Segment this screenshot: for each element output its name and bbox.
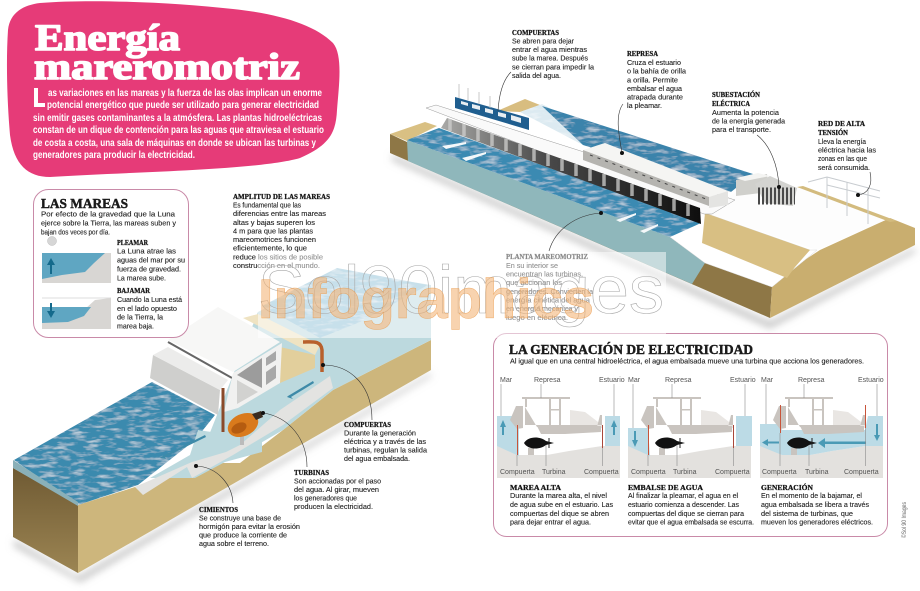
text: subestación eléctrica xyxy=(712,89,786,134)
block: sand pit xyxy=(702,213,810,278)
text: subestación eléctrica: para el transporte. xyxy=(712,125,771,134)
watermark: Infographics: Infographics xyxy=(258,267,594,330)
text: compuertas right: sube la marea. Después xyxy=(512,54,588,62)
text: compuertas left: COMPUERTAS xyxy=(344,420,391,429)
text: represa: o la bahía de orilla xyxy=(627,66,687,76)
diagram: embalse de agua: Compuerta xyxy=(715,469,750,476)
diagram: generación: Represa xyxy=(798,377,825,384)
text: embalse de agua: estuario comienza a descender. Las xyxy=(628,500,739,509)
text: planta mareomotriz: PLANTA MAREOMOTRIZ xyxy=(506,252,588,261)
text: marea alta: para dejar entrar el agua. xyxy=(510,518,591,526)
diagram: marea alta: Compuerta xyxy=(584,469,619,476)
intro: Por efecto de la gravedad que la Luna xyxy=(41,210,176,218)
subtitle: Al igual que en una central hidroeléctrica, el agua embalsada mueve una turbina que acciona los generadores. xyxy=(510,356,864,366)
text: red de alta tensión: TENSIÓN xyxy=(818,127,849,137)
dam: interior lower chamber xyxy=(237,380,258,404)
text: compuertas right: Se abren para dejar xyxy=(512,36,574,46)
diagram: marea alta: Turbina xyxy=(542,469,566,476)
panel frame xyxy=(494,334,888,536)
text: embalse de agua: compuertas del dique se cierran para xyxy=(628,509,745,518)
diagram: marea alta: Compuerta xyxy=(500,469,535,476)
dam: turbine hall strip xyxy=(441,118,701,224)
heading: LA GENERACIÓN DE ELECTRICIDAD xyxy=(509,342,753,357)
diagram: embalse de agua: Turbina xyxy=(673,469,697,476)
plant building: end wall xyxy=(709,191,728,208)
text: turbinas xyxy=(294,468,381,511)
text: planta mareomotriz xyxy=(506,252,594,322)
text: bajamar: en el lado opuesto xyxy=(117,304,177,313)
text: compuertas left: del agua embalsada. xyxy=(344,454,410,463)
intro text: as variaciones en las mareas y la fuerza de las olas implican un enorme xyxy=(48,88,322,99)
text: amplitud de las mareas: mareomotrices funcionen xyxy=(233,235,316,244)
text: turbinas: los generadores que xyxy=(294,494,357,502)
text: cimientos xyxy=(199,505,300,548)
illustration: right isometric view of tidal plant xyxy=(390,84,915,318)
text: cimientos: hormigón para evitar la erosión xyxy=(199,522,300,531)
diagram: embalse de agua xyxy=(628,377,756,478)
diagram: embalse de agua: Estuario xyxy=(730,377,756,384)
text: planta mareomotriz: generadores. Convierten la xyxy=(506,287,594,296)
watermark: Sol90images outline: Sol90images xyxy=(258,252,664,328)
estuary shallow water xyxy=(205,270,431,455)
intro text: potencial energético que puede ser utilizado para generar electricidad xyxy=(47,100,319,111)
blue gate frame xyxy=(455,84,529,130)
dam: column windows xyxy=(266,351,276,385)
text: compuertas right: se cierran para impedir la xyxy=(512,62,595,72)
text: amplitud de las mareas: altas y bajas superen los xyxy=(233,218,315,227)
intro text xyxy=(33,88,324,161)
shadow: right block xyxy=(392,155,915,328)
gate: rear xyxy=(303,342,322,372)
text: planta mareomotriz: luego en eléctrica. xyxy=(506,313,568,322)
text: compuertas right: salida del agua. xyxy=(512,71,561,80)
flow arrow: sea xyxy=(160,435,206,459)
dam: lower slab xyxy=(153,347,228,390)
high-voltage line: sand strip and pylons xyxy=(797,177,897,224)
text: represa: a orilla. Permite xyxy=(627,76,678,84)
text: generación: agua embalsada se libera a través xyxy=(761,500,869,509)
flow arrow: estuary xyxy=(287,381,314,399)
diagram: generación: Estuario xyxy=(858,377,884,384)
text: represa: Cruza el estuario xyxy=(627,58,681,67)
sea water surface xyxy=(14,382,215,505)
text: cimientos: Se construye una base de xyxy=(199,514,281,522)
text: subestación eléctrica: Aumenta la potencia xyxy=(712,108,780,117)
text: embalse de agua xyxy=(628,483,754,526)
submerged channel xyxy=(150,430,262,478)
leader: planta mareomotriz xyxy=(549,211,603,251)
text: planta mareomotriz: En su interior se xyxy=(506,261,558,270)
estuary: foam zone xyxy=(520,104,590,145)
text: marea alta: Durante la marea alta, el nivel xyxy=(510,491,607,500)
text: cimientos: agua sobre el terreno. xyxy=(199,539,269,548)
diagram: embalse de agua: Mar xyxy=(628,377,641,384)
diagram: generación: Mar xyxy=(761,377,774,384)
gate: front xyxy=(222,388,224,432)
estuary water surface xyxy=(262,268,428,338)
flow arrows in sea water xyxy=(442,142,658,233)
text: marea alta: de agua sube en el estuario. Las xyxy=(510,500,613,509)
text: turbinas: TURBINAS xyxy=(294,468,329,477)
leader: compuertas left xyxy=(321,363,372,420)
sea water edge xyxy=(13,460,78,506)
plant building: window row xyxy=(590,155,706,199)
text: bajamar: BAJAMAR xyxy=(117,286,151,295)
text: planta mareomotriz: en energía mecánica y xyxy=(506,304,578,313)
intro text: de costa a costa, una sala de máquinas en donde se ubican las turbinas y xyxy=(33,138,316,149)
panel: la generación de electricidad xyxy=(494,334,888,536)
text: bajamar: marea baja. xyxy=(117,322,154,330)
panel: las mareas xyxy=(34,190,188,338)
leader: compuertas right xyxy=(498,72,511,111)
drop cap xyxy=(34,88,45,107)
dam: dark groove xyxy=(168,342,232,378)
text: pleamar: PLEAMAR xyxy=(117,238,149,247)
text: generación: mueven los generadores eléctricos. xyxy=(761,518,873,526)
diagram: embalse de agua: Compuerta xyxy=(631,469,666,476)
diagram: marea alta xyxy=(497,377,625,478)
block: right sand face xyxy=(770,218,915,318)
credit: ©Sol 90 Images xyxy=(901,502,908,538)
earth block: side face xyxy=(78,340,431,573)
estuary: back water surface xyxy=(542,106,753,192)
text: compuertas left: turbinas, regulan la salida xyxy=(344,446,428,454)
text: compuertas left: Durante la generación xyxy=(344,428,416,438)
leader: red de alta tensión xyxy=(856,172,871,197)
text: subestación eléctrica: SUBESTACIÓN xyxy=(712,89,761,99)
diagram: embalse de agua: Represa xyxy=(665,377,692,384)
intro text: sin emitir gases contaminantes a la atmósfera. Las plantas hidroeléctricas xyxy=(33,113,322,124)
text: amplitud de las mareas: AMPLITUD DE LAS MAREAS xyxy=(233,192,330,201)
leader: subestación xyxy=(757,135,781,189)
text: pleamar: La Luna atrae las xyxy=(117,246,176,256)
text: compuertas right: COMPUERTAS xyxy=(512,28,559,37)
dam: interior opening xyxy=(224,343,282,412)
text: compuertas left: eléctrica y a través de las xyxy=(344,437,426,446)
dam: roof xyxy=(168,307,280,372)
title: mareromotriz xyxy=(34,47,300,88)
text: marea alta: compuertas del dique se abren xyxy=(510,509,609,518)
diagram: generación: Turbina xyxy=(805,469,829,476)
intro xyxy=(41,210,176,236)
substation xyxy=(736,173,797,206)
diagram: generación xyxy=(760,377,884,478)
text: subestación eléctrica: ELÉCTRICA xyxy=(712,98,751,108)
text: marea alta: MAREA ALTA xyxy=(510,483,562,492)
text: embalse de agua: evitar que el agua embalsada se escurra. xyxy=(628,518,754,526)
sea: front water surface xyxy=(407,128,701,237)
text: compuertas right xyxy=(512,28,595,80)
text: amplitud de las mareas xyxy=(233,192,330,270)
diagram: marea alta: Represa xyxy=(534,377,561,384)
text: planta mareomotriz: encuentran las turbinas, xyxy=(506,270,583,278)
text: embalse de agua: EMBALSE DE AGUA xyxy=(628,483,704,492)
dam: interior chamber xyxy=(237,358,262,388)
text: compuertas left xyxy=(344,420,428,463)
diagram: high tide xyxy=(42,253,111,283)
text: amplitud de las mareas: construcción en el mundo. xyxy=(233,261,320,270)
dam: sand chamber xyxy=(243,314,320,383)
text: red de alta tensión: RED DE ALTA xyxy=(818,119,866,128)
text: represa xyxy=(627,49,687,110)
estuary: back sand xyxy=(497,99,540,112)
diagram: marea alta: Estuario xyxy=(599,377,625,384)
watermark haze xyxy=(258,252,666,338)
illustration: left cross-section of tidal dam xyxy=(13,268,431,573)
block: rear white land xyxy=(702,187,890,250)
text: red de alta tensión xyxy=(818,119,876,172)
text: turbinas: producen la electricidad. xyxy=(294,502,373,511)
text: red de alta tensión: eléctrica hacia las xyxy=(818,146,876,154)
text: planta mareomotriz: energía cinética del agua xyxy=(506,296,591,304)
text: bajamar: de la Tierra, la xyxy=(117,312,164,322)
dam: white deck xyxy=(426,105,735,214)
text: generación xyxy=(761,482,873,526)
blob shape xyxy=(7,1,340,177)
text: red de alta tensión: zonas en las que xyxy=(818,154,867,163)
text: bajamar: Cuando la Luna está xyxy=(117,295,183,304)
text: marea alta xyxy=(510,483,613,526)
text: pleamar: fuerza de gravedad. xyxy=(117,264,181,274)
text: generación: En el momento de la bajamar, el xyxy=(761,491,862,500)
text: red de alta tensión: Lleva la energía xyxy=(818,137,867,146)
text: bajamar xyxy=(117,286,183,330)
intro: bajan dos veces por día. xyxy=(41,228,110,236)
block: white road xyxy=(670,212,817,287)
text: cimientos: que produce la corriente de xyxy=(199,530,287,540)
text: compuertas right: entrar el agua mientras xyxy=(512,45,587,54)
dam: piers xyxy=(450,119,688,216)
text: turbinas: Son accionadas por el paso xyxy=(294,476,381,486)
turbine xyxy=(224,408,263,445)
panel frame xyxy=(34,190,188,338)
intro text: constan de un dique de contención para las aguas que atraviesa el estuario xyxy=(33,125,324,136)
plant building: roof xyxy=(583,143,728,197)
intro: ejerce sobre la Tierra, las mareas suben y xyxy=(41,218,176,228)
block: left sand corner xyxy=(390,122,437,141)
text: embalse de agua: Al finalizar la pleamar, el agua en el xyxy=(628,491,738,500)
dam: grey front wall xyxy=(150,355,220,415)
panel: title blob xyxy=(7,1,340,177)
text: amplitud de las mareas: 4 m para que las plantas xyxy=(233,226,313,236)
text: pleamar xyxy=(117,238,185,282)
intro text: generadores para producir la electricidad. xyxy=(33,150,195,161)
heading: LAS MAREAS xyxy=(41,196,128,211)
text: planta mareomotriz: que accionan los xyxy=(506,278,562,287)
diagram: generación: Compuerta xyxy=(844,469,879,476)
text: generación: GENERACIÓN xyxy=(761,482,814,492)
text: red de alta tensión: será consumida. xyxy=(818,163,870,172)
leader: cimientos xyxy=(194,464,233,503)
text: amplitud de las mareas: diferencias entre las mareas xyxy=(233,209,326,218)
text: cimientos: CIMIENTOS xyxy=(199,505,238,514)
text: generación: del sistema de turbinas, que xyxy=(761,509,853,518)
block: left face xyxy=(390,134,772,318)
text: represa: atrapada durante xyxy=(627,92,683,102)
text: pleamar: aguas del mar por su xyxy=(117,256,185,264)
plant building: front wall xyxy=(583,150,709,206)
text: represa: embalsar el agua xyxy=(627,84,683,93)
text: represa: REPRESA xyxy=(627,49,659,58)
title xyxy=(34,18,300,88)
block: teal section of sea water xyxy=(407,140,705,284)
text: subestación eléctrica: de la energía generada xyxy=(712,116,786,126)
title: Energía xyxy=(35,18,180,59)
shadow: left block xyxy=(14,373,431,582)
text: amplitud de las mareas: reduce los sitios de posible xyxy=(233,252,323,262)
icon: moon xyxy=(48,236,56,246)
text: amplitud de las mareas: Es fundamental que las xyxy=(233,200,301,210)
text: represa: la pleamar. xyxy=(627,101,662,110)
diagram: low tide xyxy=(42,298,111,332)
text: amplitud de las mareas: eficientemente, lo que xyxy=(233,244,307,252)
leader: turbinas xyxy=(261,411,307,467)
diagram: marea alta: Mar xyxy=(500,377,513,384)
text: pleamar: La marea sube. xyxy=(117,274,166,282)
diagram: generación: Compuerta xyxy=(762,469,797,476)
concrete foundation xyxy=(135,376,333,495)
leader: represa xyxy=(618,104,624,155)
earth block: front face xyxy=(13,468,78,573)
text: turbinas: del agua. Al girar, mueven xyxy=(294,485,379,494)
